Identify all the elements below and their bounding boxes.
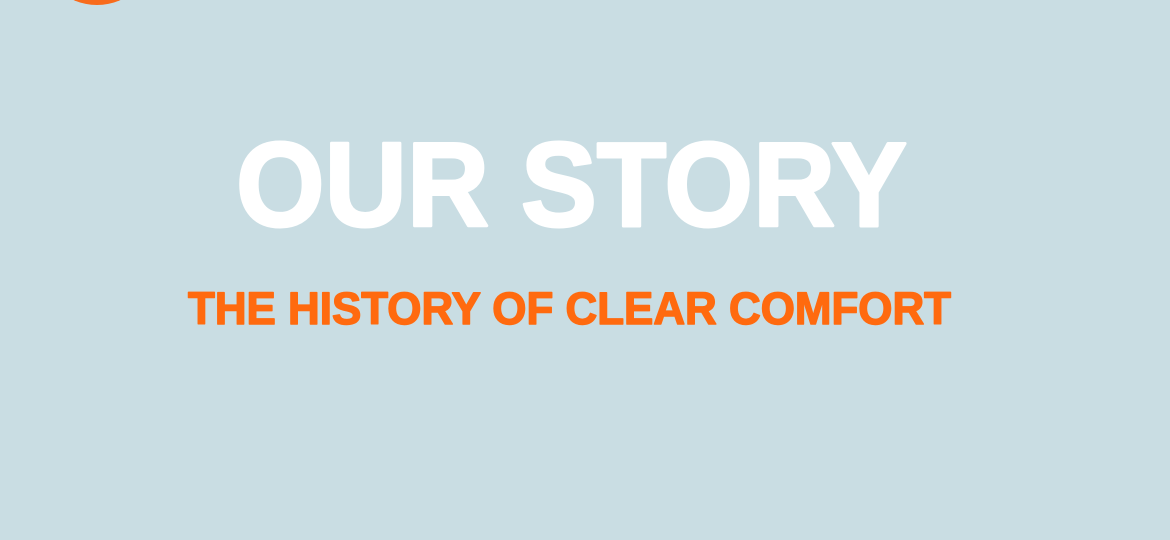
icon: orange circle (partially visible) <box>39 0 155 5</box>
subtitle: THE HISTORY OF CLEAR COMFORT <box>188 283 951 334</box>
title: OUR STORY <box>236 118 907 252</box>
